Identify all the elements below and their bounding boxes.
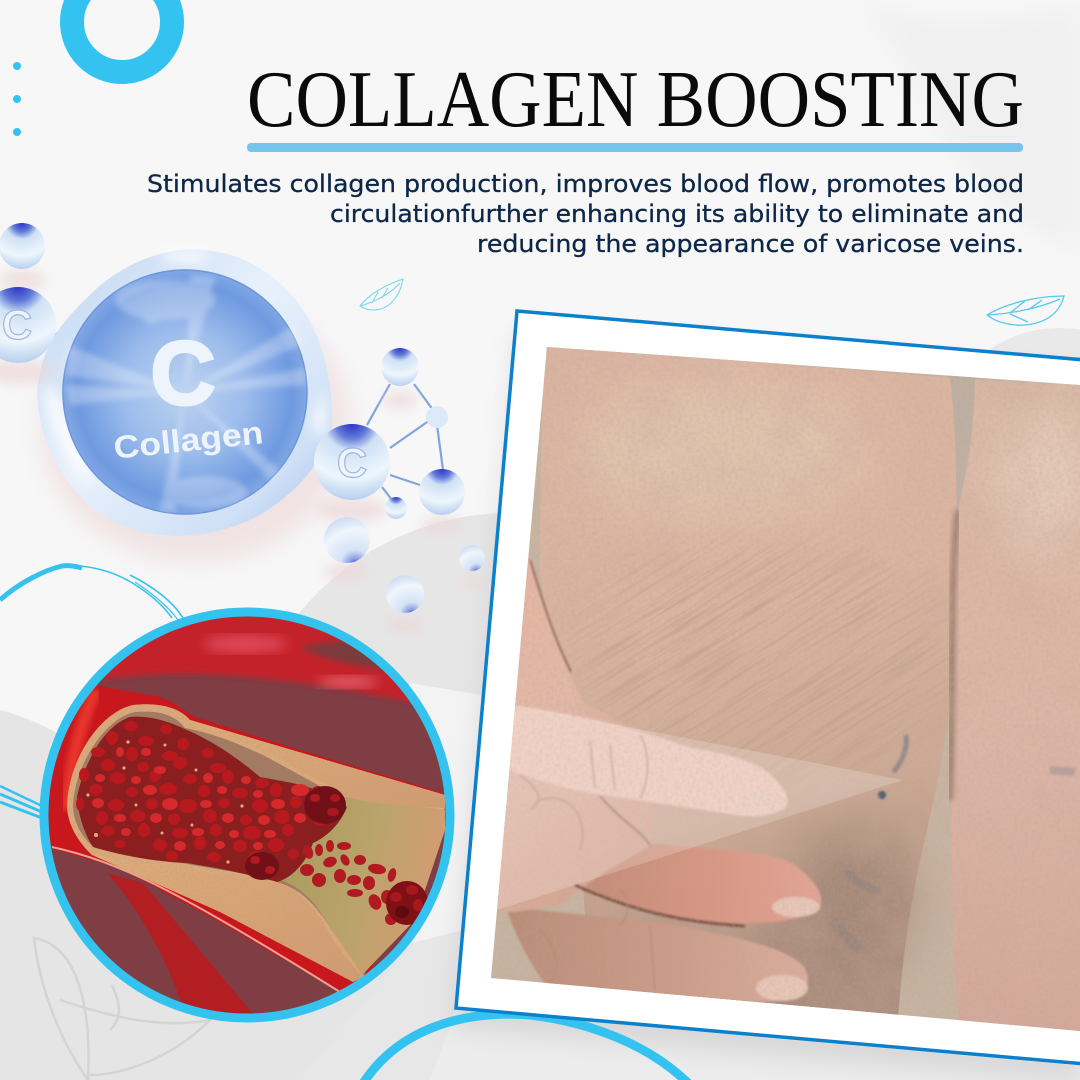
collagen core [63,270,307,514]
fingernails [756,808,820,1002]
upper plaque [190,720,445,808]
sphere shadows [0,270,485,633]
description text: Stimulates collagen production, improves blood flow, promotes blood [147,170,1024,198]
collagen letter: C [150,324,216,424]
shell highlights [42,249,326,490]
loose blood cells [287,840,398,925]
leaf icon: large [987,296,1064,325]
maroon wedge [300,642,400,672]
lower plaque [92,855,363,982]
lower wall highlight [52,847,340,992]
finger two [570,844,821,923]
photo backdrop [480,340,1080,1040]
crease under finger one [600,796,650,845]
vein illustration [40,604,452,1022]
vessel highlight [66,690,96,810]
shadow: molecule [40,287,350,563]
vessel inner wall [67,704,445,977]
vein marks [830,735,1075,950]
thumb shade line [530,560,571,672]
fine skin grain [512,402,1080,999]
brush ring bottom [362,1014,690,1080]
left leg [540,345,957,1020]
photo frame [456,311,1080,1064]
photo: legs and hand [491,347,1080,1031]
leg wrinkles [590,546,946,752]
collagen label: Collagen [112,414,265,466]
finger one [510,705,788,816]
sphere letter left: C [2,301,32,348]
spheres [0,223,45,269]
right leg [952,380,1080,1040]
upper clot [304,786,346,824]
molecule bonds [367,384,443,500]
lumen back [73,712,445,975]
narrowed green lumen [280,795,445,975]
hand [480,554,821,1002]
dark crease between legs [950,510,958,800]
description text: reducing the appearance of varicose veins. [477,230,1024,258]
brush ring left [0,566,183,818]
description text [147,170,1024,258]
leaf icon: small [360,279,403,310]
lower clot [245,852,279,880]
molecule: collagen [0,223,485,633]
small sphere behind left [49,330,81,362]
description text: circulationfurther enhancing its ability to eliminate and [330,200,1024,228]
collagen outer shell [37,249,332,536]
vein circle border [44,612,450,1018]
mottled skin texture [805,701,954,936]
vein circle fill [42,610,452,1020]
title underline [247,143,1023,152]
finger three [505,905,808,1002]
vessel outer wall [40,685,450,992]
translucent triangle [497,705,903,910]
sphere letter right: C [337,439,367,486]
decorative top ring [72,0,172,72]
three dots [13,62,21,136]
core rays and highlights [66,275,306,512]
photo shadow [450,330,1080,1080]
upper blurred artery [101,616,412,706]
title: COLLAGEN BOOSTING [247,56,1024,144]
small sphere behind right [290,425,320,455]
right cell clump [386,881,428,925]
knuckle lines [520,735,655,990]
back of hand [480,554,652,912]
skin tone patches [570,380,1080,1010]
crease between fingers two and three [575,885,745,926]
upper gap between legs [948,376,975,506]
leaf outline bottom left [34,938,210,1080]
blood cell mass [76,717,347,883]
lower blurred artery [107,873,253,1014]
